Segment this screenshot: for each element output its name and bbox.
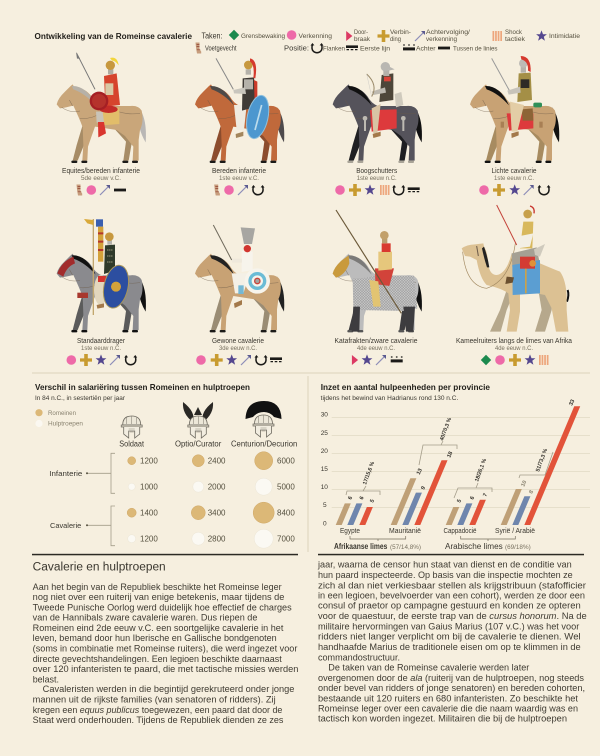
- salary numbers: 1200: [140, 535, 158, 544]
- province labels: Cappadocië: [444, 528, 477, 535]
- chart axis: 20: [321, 448, 328, 455]
- article: right column: overgenomen door de ala (ruiterij van de hulptroepen, nog steeds: [318, 673, 584, 683]
- captions row 1: 1ste eeuw v.C.: [219, 175, 259, 182]
- legend: positions: Flanken: [323, 46, 345, 52]
- bar value labels: 13: [416, 468, 424, 476]
- salary numbers: 2800: [208, 535, 226, 544]
- captions row 1: 1ste eeuw n.C.: [494, 175, 534, 182]
- article: right column: hun paard inspecteerde. Op basis van die inspectie mochten ze: [318, 570, 573, 580]
- limes labels: Afrikaanse limes: [334, 542, 388, 551]
- salary bubbles: [127, 452, 274, 548]
- limes labels: (57/14,8%): [390, 545, 421, 551]
- salary numbers: 1400: [140, 509, 158, 518]
- captions row 1: 1ste eeuw n.C.: [357, 175, 397, 182]
- figure: Gewone cavalerie: [195, 225, 284, 332]
- article: left column: Tweede Punische Oorlog werd duidelijk hoe effectief de charges: [33, 602, 292, 612]
- captions row 2: Katafrakten/zware cavalerie: [334, 338, 418, 345]
- helmet: optio: [183, 402, 213, 438]
- legend: tasks: Door-: [354, 30, 368, 36]
- row labels and brackets: Cavalerie: [50, 521, 81, 530]
- figure: Bereden infanterie: [195, 58, 284, 163]
- article: left column: Romeinen eind 2de eeuw v.C. een soortgelijke cavalerie in het: [33, 623, 284, 633]
- bar value labels: 5: [456, 499, 463, 504]
- salary numbers: 7000: [277, 535, 295, 544]
- article: left column: Aan het begin van de Republiek beschikte het Romeinse leger: [33, 582, 282, 592]
- figure: Standaarddrager: [57, 219, 146, 332]
- province brackets and totals: [346, 417, 553, 498]
- bar value labels: 10: [520, 480, 528, 488]
- chart axis: 25: [321, 430, 328, 437]
- bar value labels: 6: [469, 496, 476, 501]
- legend: positions: Tussen de linies: [453, 46, 498, 52]
- captions row 2: Gewone cavalerie: [212, 338, 264, 345]
- province labels: [340, 528, 535, 535]
- helmet: centurion: [246, 401, 282, 437]
- row labels and brackets: [49, 453, 115, 546]
- figure: Equites: [57, 52, 146, 163]
- chart heading: Inzet en aantal hulpeenheden per provincie: [321, 382, 490, 392]
- helmet: soldaat: [121, 416, 142, 438]
- article: right column: militaire hervormingen van Gaius Marius (107 v.C.) was het voor: [318, 621, 579, 631]
- bar value labels: 6: [347, 496, 354, 501]
- chart axis: 30: [321, 412, 328, 418]
- column labels: Optio/Curator: [175, 440, 222, 448]
- article: left column: leven, bemand door hun Iberische en Gallische bondgenoten: [33, 633, 277, 643]
- task icons row 2: [66, 354, 548, 366]
- province labels: Syrië / Arabië: [495, 528, 535, 535]
- salary heading: Verschil in salariëring tussen Romeinen en hulptroepen: [35, 382, 250, 392]
- title: Ontwikkeling van de Romeinse cavalerie: [34, 31, 192, 41]
- article: left column: mannen uit de rijkste families (van senatoren of ridders). Zij: [33, 694, 276, 704]
- article: left column: (soms in combinatie met Romeinse ruiters), die werd ingezet voor: [33, 644, 297, 654]
- article: right column: zich al dan niet verkiesbaar stellen als krijgstribuun (stafofficier: [318, 580, 586, 590]
- article: right column: De taken van de Romeinse cavalerie werden later: [328, 663, 529, 673]
- legend: tasks: Shock: [505, 30, 523, 36]
- article: right column: commandostructuur.: [318, 652, 400, 662]
- article: right column: jaar, waarna de censor hun staat van dienst en de conditie van: [317, 560, 572, 570]
- header with title and legend: [34, 30, 581, 54]
- bar value labels: 6: [359, 496, 366, 501]
- legend: tasks: Taken:: [202, 32, 222, 40]
- captions row 2: 3de eeuw n.C.: [219, 345, 257, 352]
- legend: tasks: verkenning: [426, 37, 457, 43]
- province brackets and totals: 18/26,1 %: [474, 458, 488, 483]
- bar value labels: 5: [369, 499, 376, 504]
- figure: Katafrakten: [333, 210, 422, 332]
- legend: positions: [284, 43, 498, 53]
- province labels: Egypte: [340, 528, 360, 535]
- chart axis: 10: [321, 484, 328, 491]
- chart axis: 15: [321, 466, 328, 473]
- chart axis: 0: [323, 520, 327, 528]
- salary legend: Hulptroepen: [48, 422, 83, 428]
- column labels: Centurion/Decurion: [231, 440, 297, 448]
- bar value labels: 8: [528, 490, 535, 495]
- article: right column: voor de quaestuur, de eerste trap van de cursus honorum . Na de: [318, 611, 587, 621]
- task icons row 1: [76, 184, 550, 196]
- bars: [336, 406, 580, 525]
- province labels: Mauritanië: [389, 528, 421, 535]
- figure: Lichte cavalerie: [470, 56, 559, 163]
- limes labels: Arabische limes: [445, 542, 503, 551]
- salary subheading: In 84 n.C., in sestertiën per jaar: [35, 396, 125, 402]
- salary legend: [35, 409, 83, 428]
- salary numbers: 1000: [140, 483, 158, 492]
- province brackets and totals: 17/15,6 %: [362, 461, 376, 486]
- panel: auxiliary units bar chart: [321, 382, 590, 551]
- article: right column: consul of praetor op campagne gestuurd en konden ze opteren: [318, 601, 581, 611]
- salary numbers: 1200: [140, 457, 158, 466]
- article: left column: over 120 infanteristen te paard, die met tactische missies werden: [33, 664, 298, 674]
- legend: positions: Achter: [416, 46, 436, 52]
- figure: Kameelruiters: [462, 205, 568, 332]
- legend: tasks: tactiek: [505, 37, 526, 43]
- column labels: [119, 440, 297, 448]
- panel: salary comparison: [35, 382, 297, 548]
- captions row 2: Standaarddrager: [77, 338, 126, 345]
- limes labels: [334, 536, 531, 551]
- article: right column: tactisch kon worden ingezet. Militairen die bij de hulptroepen: [318, 714, 567, 724]
- captions row 1: 5de eeuw v.C.: [81, 175, 121, 182]
- bar value labels: [347, 399, 576, 504]
- chart axis: 5: [323, 502, 327, 509]
- article: left column: Staat werd onderhouden. Tijdens de Republiek dienden ze zes: [33, 715, 284, 725]
- article: left column: belast.: [33, 674, 59, 684]
- article: left column: kregen een equus publicus toegewezen, een paard dat door de: [33, 705, 282, 715]
- legend: positions: Eerste lijn: [360, 46, 390, 52]
- legend: tasks: Verbin-: [390, 30, 411, 36]
- legend: tasks: Achtervolging/: [426, 30, 470, 36]
- salary numbers: [140, 457, 295, 544]
- article: left column: Cavaleristen werden in die begintijd gerekruteerd onder jonge: [43, 684, 294, 694]
- article: right column: [317, 560, 587, 724]
- legend: tasks: braak: [354, 37, 371, 43]
- captions row 1: Lichte cavalerie: [492, 168, 537, 175]
- salary legend: Romeinen: [48, 411, 76, 417]
- salary numbers: 8400: [277, 509, 295, 518]
- article: right column: handhaafde Marius de traditionele eisen om op te klimmen in de: [318, 642, 581, 652]
- captions row 1: Boogschutters: [356, 168, 398, 175]
- legend: tasks: [196, 30, 581, 54]
- province brackets and totals: 51/73,3 %: [535, 448, 549, 473]
- article: left column: [33, 582, 298, 725]
- salary numbers: 2400: [208, 457, 226, 466]
- article: left column: van de Hannibals zware cavalerie waren. Dus riepen de: [33, 613, 257, 623]
- captions row 2: Kameelruiters langs de limes van Afrika: [456, 338, 572, 345]
- legend: positions: Positie:: [284, 44, 309, 52]
- row labels and brackets: Infanterie: [49, 469, 82, 478]
- article: right column: in een legioen, bevelvoerder van een cohort), werden ze door een: [318, 591, 585, 601]
- article heading: Cavalerie en hulptroepen: [33, 562, 166, 574]
- article: right column: Romeinse leger over een cavalerie die die naam waardig was en: [318, 703, 578, 713]
- captions row 2: 4de eeuw n.C.: [357, 345, 395, 352]
- captions row 2: [77, 338, 572, 352]
- captions row 1: Equites/bereden infanterie: [62, 168, 140, 175]
- legend: tasks: Verkenning: [298, 34, 332, 40]
- figure: Boogschutters: [333, 62, 422, 163]
- legend: tasks: Voetgevecht: [205, 44, 236, 52]
- bar value labels: 7: [482, 493, 489, 498]
- salary numbers: 3400: [208, 509, 226, 518]
- province brackets and totals: 40/70,3 %: [439, 417, 453, 442]
- bar value labels: 9: [420, 486, 427, 491]
- salary numbers: 5000: [277, 483, 295, 492]
- chart axis: [321, 412, 590, 528]
- captions row 1: [62, 168, 537, 182]
- legend: tasks: Intimidatie: [549, 34, 581, 40]
- bar value labels: 33: [568, 399, 576, 407]
- chart subheading: tijdens het bewind van Hadrianus rond 130 n.C.: [321, 396, 459, 402]
- article: left column: nog niet over een ruiterij van enige betekenis, maar tijdens de: [33, 592, 284, 602]
- salary numbers: 6000: [277, 457, 295, 466]
- salary numbers: 2000: [208, 483, 226, 492]
- bar value labels: 18: [446, 451, 454, 459]
- article: right column: ridders niet langer verplicht om bij de cavalerie te dienen. Wel: [318, 632, 581, 642]
- column labels: Soldaat: [119, 440, 145, 448]
- article: right column: bestaande uit 120 ruiters en 680 infanteristen. Zo beschikte het: [318, 693, 579, 703]
- legend: tasks: Grensbewaking: [241, 34, 285, 40]
- article: left column: directe gevechtshandelingen. Een legioen beschikte daarnaast: [33, 654, 282, 664]
- article: right column: onder bevel van ridders of jonge senatoren) en bereden cohorten,: [318, 683, 585, 693]
- legend: tasks: ding: [390, 37, 401, 43]
- limes labels: (69/18%): [505, 545, 531, 551]
- captions row 1: Bereden infanterie: [212, 168, 266, 175]
- captions row 2: 1ste eeuw n.C.: [81, 345, 121, 352]
- captions row 2: 4de eeuw n.C.: [495, 345, 533, 352]
